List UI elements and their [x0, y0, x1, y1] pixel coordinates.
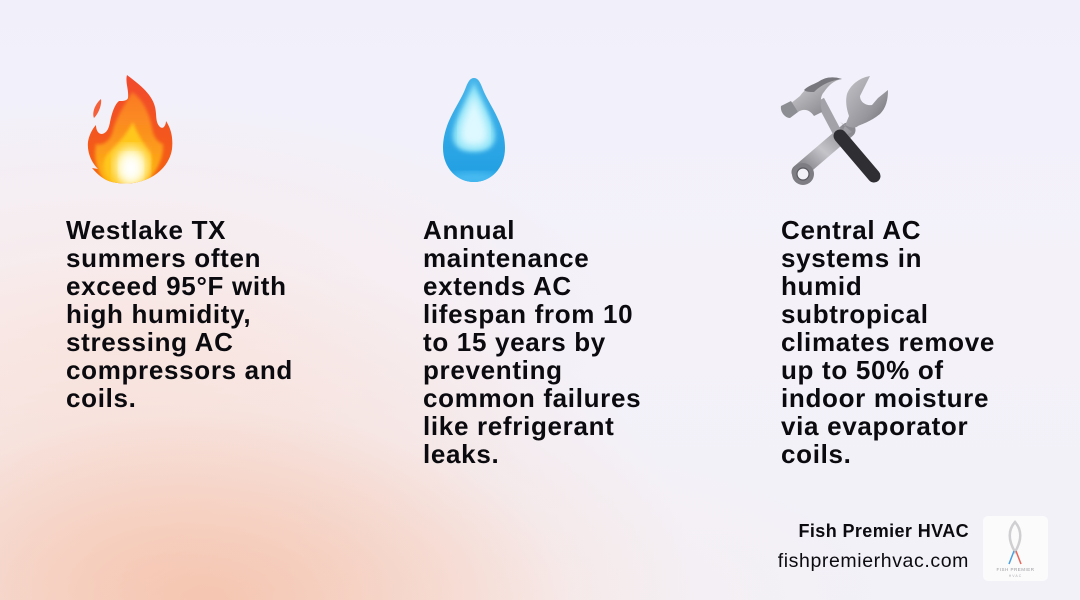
logo: FISH PREMIER: [996, 567, 1035, 572]
icon: water drop: [443, 78, 505, 182]
text block: central AC: [781, 215, 995, 469]
text block: central AC: coils.: [781, 439, 852, 469]
logo: [983, 516, 1048, 581]
text block: summers: stressing AC: [66, 327, 234, 357]
text block: maintenance: [423, 215, 641, 469]
text block: maintenance: leaks.: [423, 439, 499, 469]
icon: hammer and wrench: [780, 76, 888, 185]
text block: summers: high humidity,: [66, 299, 251, 329]
logo: HVAC: [1009, 574, 1022, 578]
text block: maintenance: Annual: [423, 215, 515, 245]
text block: maintenance: lifespan from 10: [423, 299, 633, 329]
text block: maintenance: to 15 years by: [423, 327, 606, 357]
text block: summers: compressors and: [66, 355, 293, 385]
text block: summers: exceed 95°F with: [66, 271, 287, 301]
wrench: [792, 76, 888, 185]
text block: maintenance: common failures: [423, 383, 641, 413]
text block: central AC: systems in: [781, 243, 922, 273]
text block: maintenance: maintenance: [423, 243, 589, 273]
text block: maintenance: extends AC: [423, 271, 572, 301]
icon: fire: [88, 75, 172, 184]
text block: summers: coils.: [66, 383, 137, 413]
hammer: [781, 77, 874, 176]
text block: central AC: humid: [781, 271, 862, 301]
text block: summers: Westlake TX: [66, 215, 226, 245]
text block: central AC: climates remove: [781, 327, 995, 357]
text block: central AC: Central AC: [781, 215, 921, 245]
text block: summers: [66, 215, 293, 413]
text block: maintenance: like refrigerant: [423, 411, 615, 441]
text block: central AC: indoor moisture: [781, 383, 989, 413]
brand name: Fish Premier HVAC: [798, 521, 969, 541]
text block: summers: summers often: [66, 243, 261, 273]
text block: central AC: via evaporator: [781, 411, 968, 441]
website: fishpremierhvac.com: [778, 550, 969, 572]
text block: central AC: up to 50% of: [781, 355, 944, 385]
text block: maintenance: preventing: [423, 355, 563, 385]
text block: central AC: subtropical: [781, 299, 929, 329]
